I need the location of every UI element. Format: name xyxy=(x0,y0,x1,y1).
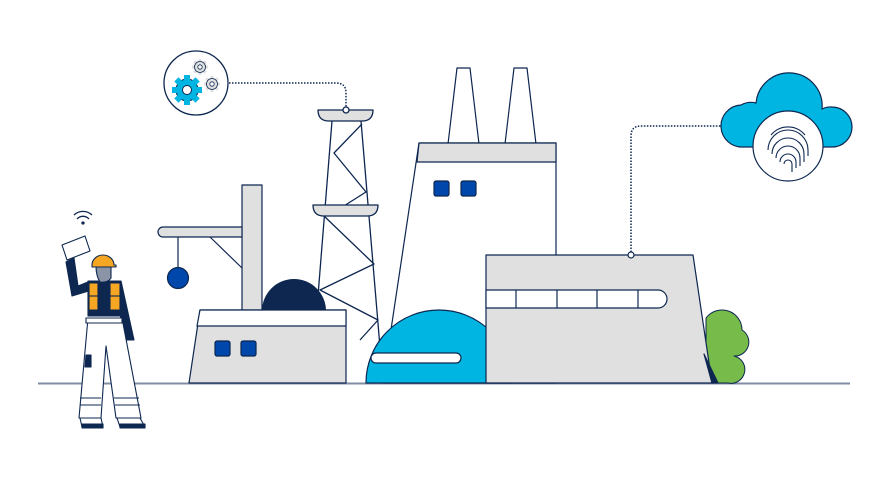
tall building with chimneys xyxy=(383,68,556,383)
worker xyxy=(62,211,145,428)
blue dome xyxy=(366,310,512,383)
connector: gears to tower xyxy=(229,83,346,110)
tree xyxy=(706,310,749,383)
icon: cloud with fingerprint xyxy=(721,73,852,181)
crane xyxy=(158,185,262,311)
right building xyxy=(486,255,718,383)
icon: gears xyxy=(164,51,228,115)
left building xyxy=(189,310,346,383)
tower xyxy=(311,107,383,383)
dark dome xyxy=(262,279,326,311)
icon: wifi xyxy=(74,211,92,224)
tablet xyxy=(62,236,90,260)
connector: building to cloud xyxy=(631,126,724,255)
ground line xyxy=(38,382,850,384)
